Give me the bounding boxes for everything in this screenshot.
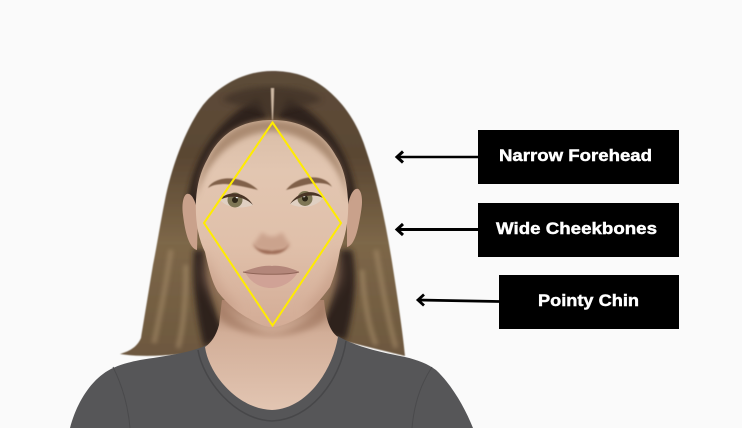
face: [196, 120, 348, 327]
neck: [205, 300, 338, 410]
hair: [120, 71, 405, 356]
arrow: pointy chin: [418, 294, 499, 306]
label: narrow forehead: Narrow Forehead: [499, 146, 652, 165]
hair part: [271, 88, 274, 120]
shirt collar: [198, 341, 346, 421]
hairline shading: [196, 120, 348, 200]
arrow: wide cheekbones: [397, 224, 478, 235]
cheek shading: [203, 245, 341, 312]
eyes: [220, 191, 323, 208]
shirt: [70, 336, 473, 428]
label: pointy chin: [499, 275, 679, 329]
dark hair near face: [186, 98, 358, 347]
label: narrow forehead: [478, 130, 679, 184]
shirt seams: [113, 367, 432, 428]
nose: [253, 232, 290, 254]
portrait of woman: [70, 71, 473, 428]
eyebrows: [208, 177, 332, 190]
chin shadow under jaw: [219, 303, 326, 336]
label: pointy chin: Pointy Chin: [538, 291, 639, 310]
ears: [182, 189, 362, 250]
label: wide cheekbones: Wide Cheekbones: [496, 219, 657, 238]
yellow diamond outline: [204, 122, 341, 326]
crown shading: [222, 86, 322, 120]
lips: [243, 266, 299, 288]
hair highlights: [154, 250, 396, 348]
arrow: narrow forehead: [397, 152, 478, 162]
label: wide cheekbones: [478, 203, 679, 257]
